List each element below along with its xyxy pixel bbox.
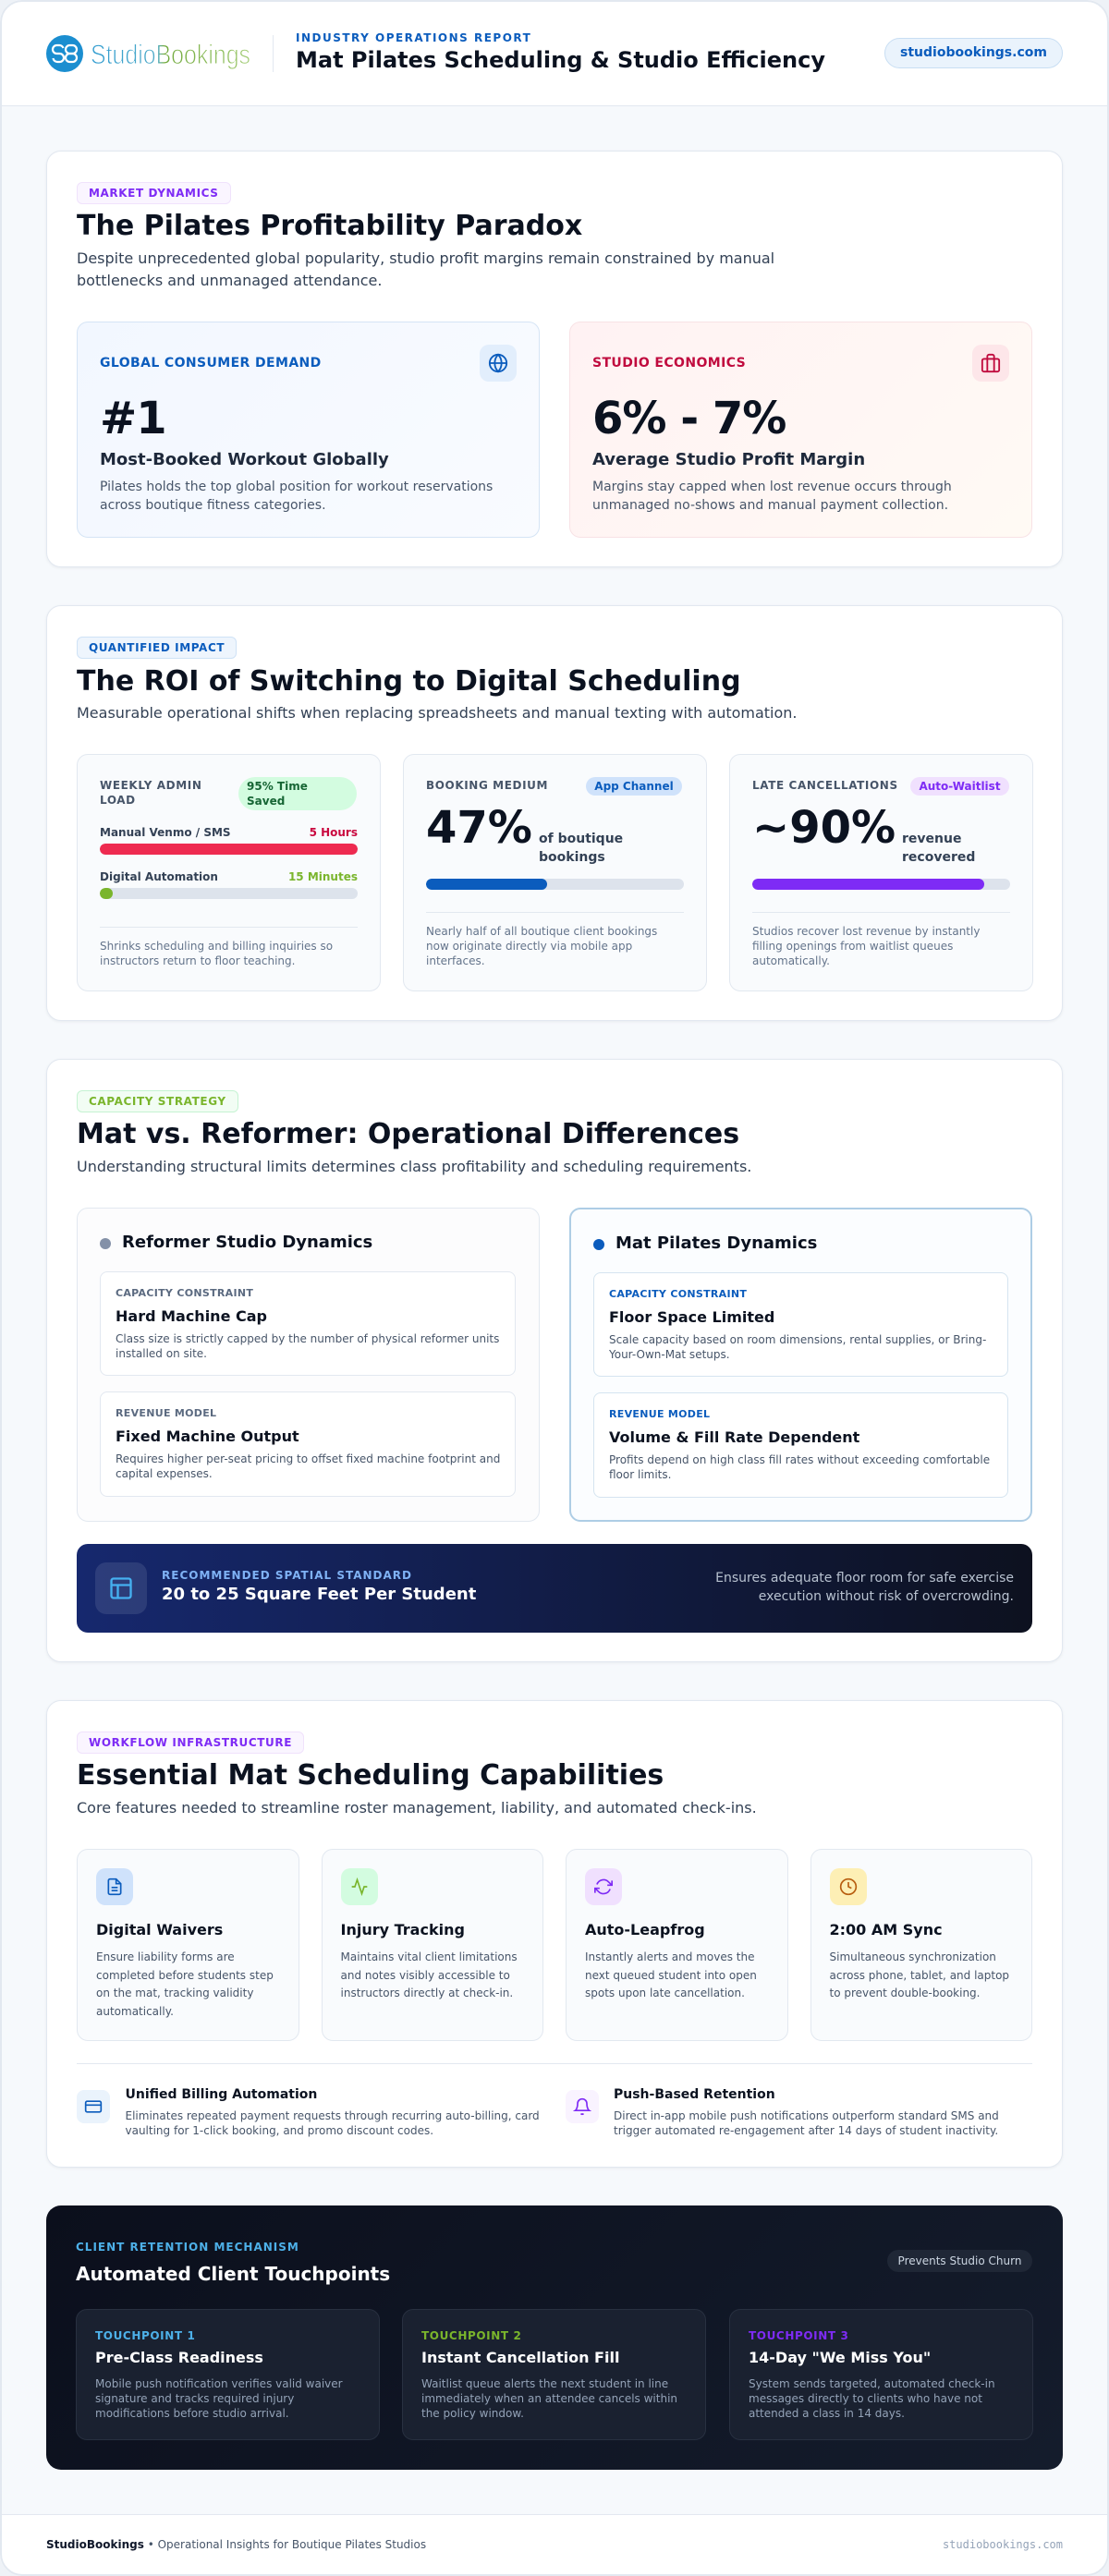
text: vaulting for 1-click booking, and promo discount codes.: [126, 2124, 433, 2137]
sub-card: capacity: [100, 1271, 516, 1376]
text: modifications before studio arrival.: [95, 2407, 289, 2420]
text: [585, 1950, 757, 1999]
pill: time saved: 95% Time Saved: [247, 780, 308, 808]
description: Pilates holds the top global position for workout reservations: [100, 480, 493, 494]
pill: App Channel: [594, 780, 674, 793]
icon: document: [96, 1868, 133, 1905]
badge: [77, 1732, 304, 1754]
pill: time saved: [238, 777, 357, 810]
text: immediately when an attendee cancels within: [421, 2392, 677, 2405]
stat title: Average Studio Profit Margin: [592, 450, 865, 469]
icon: bell: [566, 2090, 599, 2123]
text: instructors directly at check-in.: [340, 1987, 513, 1999]
text: [830, 1950, 1009, 1999]
card: mat pilates: [569, 1208, 1032, 1522]
panel: market dynamics: [46, 151, 1063, 567]
eyebrow: INDUSTRY OPERATIONS REPORT: [296, 31, 531, 44]
stat: 6% - 7%: [592, 393, 786, 444]
callout: spatial standard: [77, 1544, 1032, 1633]
title: 2:00 AM Sync: [830, 1921, 943, 1938]
pill: Auto-Waitlist: [919, 780, 1001, 793]
badge: [77, 637, 237, 659]
label: LOAD: [100, 794, 136, 807]
feature: auto-leapfrog: [566, 1849, 787, 2041]
text: [421, 2377, 677, 2420]
title: Unified Billing Automation: [126, 2087, 317, 2102]
text: spots upon late cancellation.: [585, 1987, 745, 1999]
badge: CAPACITY STRATEGY: [89, 1095, 226, 1108]
eyebrow: CLIENT RETENTION MECHANISM: [76, 2241, 299, 2254]
text: Waitlist queue alerts the next student in line: [421, 2377, 668, 2390]
text: floor limits.: [609, 1468, 671, 1481]
bullet: [100, 1238, 111, 1249]
text: System sends targeted, automated check-in: [749, 2377, 995, 2390]
subheading: [77, 249, 774, 289]
description: Studios recover lost revenue by instantly: [752, 925, 980, 938]
footer brand: StudioBookings • Operational Insights for Boutique Pilates Studios: [46, 2538, 426, 2551]
text: Maintains vital client limitations: [340, 1950, 518, 1963]
sub-card: revenue: [100, 1391, 516, 1497]
text: messages directly to clients who have not: [749, 2392, 982, 2405]
text: [749, 2377, 995, 2420]
manual row label: [100, 826, 358, 839]
panel: capacity strategy: [46, 1059, 1063, 1662]
stat: 47%: [426, 802, 532, 854]
card: studio economics: [569, 322, 1032, 538]
label: TOUCHPOINT 2: [421, 2329, 521, 2342]
card heading: Reformer Studio Dynamics: [122, 1233, 372, 1252]
text: [116, 1332, 499, 1360]
title: Floor Space Limited: [609, 1308, 774, 1326]
description: unmanaged no-shows and manual payment collection.: [592, 498, 948, 513]
digital row label: 15 Minutes: [288, 870, 358, 883]
card: booking medium: [403, 754, 707, 991]
manual row label: 5 Hours: [310, 826, 358, 839]
text: Your-Own-Mat setups.: [609, 1348, 730, 1361]
text: across phone, tablet, and laptop: [830, 1968, 1009, 1981]
note: execution without risk of overcrowding.: [759, 1589, 1014, 1604]
label: TOUCHPOINT 1: [95, 2329, 195, 2342]
panel: quantified impact: [46, 605, 1063, 1021]
bar: [752, 879, 1010, 890]
heading: The Pilates Profitability Paradox: [77, 210, 582, 242]
subheading: Despite unprecedented global popularity, studio profit margins remain constrained by manual: [77, 249, 774, 267]
title: Digital Waivers: [96, 1921, 223, 1938]
label: RECOMMENDED SPATIAL STANDARD: [162, 1569, 412, 1582]
value: 20 to 25 Square Feet Per Student: [162, 1585, 476, 1604]
text: Scale capacity based on room dimensions, rental supplies, or Bring-: [609, 1333, 986, 1346]
stat unit: bookings: [539, 850, 605, 865]
text: [340, 1950, 518, 1999]
label: BOOKING MEDIUM: [426, 779, 548, 792]
icon: refresh: [585, 1868, 622, 1905]
footer url: studiobookings.com: [943, 2538, 1063, 2551]
badge: QUANTIFIED IMPACT: [89, 641, 225, 654]
text: Eliminates repeated payment requests through recurring auto-billing, card: [126, 2109, 540, 2122]
badge: [77, 1090, 238, 1112]
text: next queued student into open: [585, 1968, 757, 1981]
text: Mobile push notification verifies valid waiver: [95, 2377, 343, 2390]
text: Ensure liability forms are: [96, 1950, 235, 1963]
bullet: [593, 1239, 604, 1250]
text: [609, 1453, 990, 1481]
text: trigger automated re-engagement after 14 days of student inactivity.: [614, 2124, 998, 2137]
label: WEEKLY ADMIN: [100, 779, 201, 792]
description: across boutique fitness categories.: [100, 498, 326, 513]
touchpoint 1: [76, 2309, 380, 2440]
title: Volume & Fill Rate Dependent: [609, 1428, 859, 1446]
text: [116, 1452, 500, 1480]
icon: activity: [340, 1868, 377, 1905]
feature: injury tracking: [322, 1849, 543, 2041]
text: Requires higher per-seat pricing to offset fixed machine footprint and: [116, 1452, 500, 1465]
icon: briefcase: [972, 345, 1009, 382]
note: Ensures adequate floor room for safe exercise: [715, 1571, 1014, 1586]
website pill: studiobookings.com: [900, 45, 1047, 60]
digital row label: [100, 870, 358, 883]
label: CAPACITY CONSTRAINT: [609, 1288, 747, 1300]
description: [752, 925, 980, 967]
text: on the mat, tracking validity: [96, 1987, 253, 1999]
note: [715, 1571, 1014, 1604]
subheading: bottlenecks and unmanaged attendance.: [77, 272, 382, 289]
title: Hard Machine Cap: [116, 1307, 267, 1325]
sub-card: revenue: [593, 1392, 1008, 1498]
text: and notes visibly accessible to: [340, 1968, 510, 1981]
text: [96, 1950, 274, 2018]
label: REVENUE MODEL: [609, 1408, 710, 1420]
pill: Prevents Studio Churn: [898, 2254, 1021, 2267]
bar: [426, 879, 684, 890]
icon: layout: [95, 1562, 147, 1614]
title: Auto-Leapfrog: [585, 1921, 705, 1938]
description: interfaces.: [426, 954, 485, 967]
subheading: Measurable operational shifts when replacing spreadsheets and manual texting with automation.: [77, 704, 798, 722]
pill: [586, 777, 682, 796]
heading: Mat vs. Reformer: Operational Differences: [77, 1118, 739, 1150]
text: Class size is strictly capped by the number of physical reformer units: [116, 1332, 499, 1345]
text: Simultaneous synchronization: [830, 1950, 996, 1963]
label: REVENUE MODEL: [116, 1407, 216, 1419]
badge: MARKET DYNAMICS: [89, 187, 219, 200]
stat unit: [539, 832, 623, 865]
card: weekly admin load: [77, 754, 381, 991]
stat unit: [902, 832, 975, 865]
text: to prevent double-booking.: [830, 1987, 980, 1999]
description: Shrinks scheduling and billing inquiries so: [100, 940, 333, 953]
logo: StudioBookings: [46, 35, 250, 72]
title: Pre-Class Readiness: [95, 2349, 263, 2366]
bar: digital: [100, 888, 358, 899]
header: [0, 0, 1109, 106]
card: reformer: [77, 1208, 540, 1522]
website pill: [884, 38, 1063, 68]
subheading: Core features needed to streamline roster management, liability, and automated check-ins.: [77, 1799, 757, 1817]
title: Push-Based Retention: [614, 2087, 775, 2102]
stat unit: of boutique: [539, 832, 623, 846]
heading: The ROI of Switching to Digital Scheduling: [77, 665, 741, 698]
text: completed before students step: [96, 1968, 274, 1981]
card: global consumer demand: [77, 322, 540, 538]
sub-card: capacity: [593, 1272, 1008, 1377]
label: LATE CANCELLATIONS: [752, 779, 898, 792]
stat unit: recovered: [902, 850, 975, 865]
bar: manual: [100, 844, 358, 855]
stat title: Most-Booked Workout Globally: [100, 450, 389, 469]
text: [95, 2377, 343, 2420]
text: signature and tracks required injury: [95, 2392, 294, 2405]
description: [592, 480, 952, 513]
text: [609, 1333, 986, 1361]
heading: Essential Mat Scheduling Capabilities: [77, 1759, 664, 1792]
card: late cancellations: [729, 754, 1033, 991]
touchpoint 2: [402, 2309, 706, 2440]
text: [614, 2109, 999, 2137]
feature: 2am sync: [810, 1849, 1032, 2041]
icon: globe: [480, 345, 517, 382]
description: Margins stay capped when lost revenue occurs through: [592, 480, 952, 494]
title: Instant Cancellation Fill: [421, 2349, 619, 2366]
text: Direct in-app mobile push notifications outperform standard SMS and: [614, 2109, 999, 2122]
text: attended a class in 14 days.: [749, 2407, 905, 2420]
pill: [910, 777, 1009, 796]
subheading: Understanding structural limits determines class profitability and scheduling requirements.: [77, 1158, 751, 1175]
card heading: Mat Pilates Dynamics: [615, 1233, 817, 1253]
icon: clock: [830, 1868, 867, 1905]
panel: workflow infrastructure: [46, 1700, 1063, 2168]
pill: [887, 2250, 1032, 2272]
description: [100, 480, 493, 513]
digital row label: Digital Automation: [100, 870, 218, 883]
description: [426, 925, 657, 967]
text: automatically.: [96, 2005, 174, 2018]
footer: [0, 2514, 1109, 2576]
description: instructors return to floor teaching.: [100, 954, 295, 967]
title: Injury Tracking: [340, 1921, 465, 1938]
title: Fixed Machine Output: [116, 1428, 299, 1445]
feature row: push retention: [566, 2087, 999, 2137]
label: CAPACITY CONSTRAINT: [116, 1287, 253, 1299]
text: installed on site.: [116, 1347, 207, 1360]
text: capital expenses.: [116, 1467, 213, 1480]
card label: STUDIO ECONOMICS: [592, 356, 746, 371]
text: the policy window.: [421, 2407, 524, 2420]
feature: digital waivers: [77, 1849, 299, 2041]
badge: [77, 182, 231, 204]
stat: #1: [100, 393, 166, 444]
card label: GLOBAL CONSUMER DEMAND: [100, 356, 322, 371]
title: 14-Day "We Miss You": [749, 2349, 931, 2366]
stat: ~90%: [752, 802, 896, 854]
label: TOUCHPOINT 3: [749, 2329, 848, 2342]
description: now originate directly via mobile app: [426, 940, 632, 953]
text: [126, 2109, 540, 2137]
description: automatically.: [752, 954, 830, 967]
icon: card: [77, 2090, 110, 2123]
label: [100, 779, 201, 807]
description: Nearly half of all boutique client bookings: [426, 925, 657, 938]
description: filling openings from waitlist queues: [752, 940, 953, 953]
manual row label: Manual Venmo / SMS: [100, 826, 231, 839]
touchpoint 3: [729, 2309, 1033, 2440]
panel: client touchpoints: [46, 2205, 1063, 2470]
feature row: unified billing: [77, 2087, 540, 2137]
heading: Automated Client Touchpoints: [76, 2263, 390, 2285]
badge: WORKFLOW INFRASTRUCTURE: [89, 1736, 292, 1749]
description: [100, 940, 333, 967]
text: Instantly alerts and moves the: [585, 1950, 754, 1963]
stat unit: revenue: [902, 832, 961, 846]
text: Profits depend on high class fill rates without exceeding comfortable: [609, 1453, 990, 1466]
report title: Mat Pilates Scheduling & Studio Efficiency: [296, 47, 825, 73]
